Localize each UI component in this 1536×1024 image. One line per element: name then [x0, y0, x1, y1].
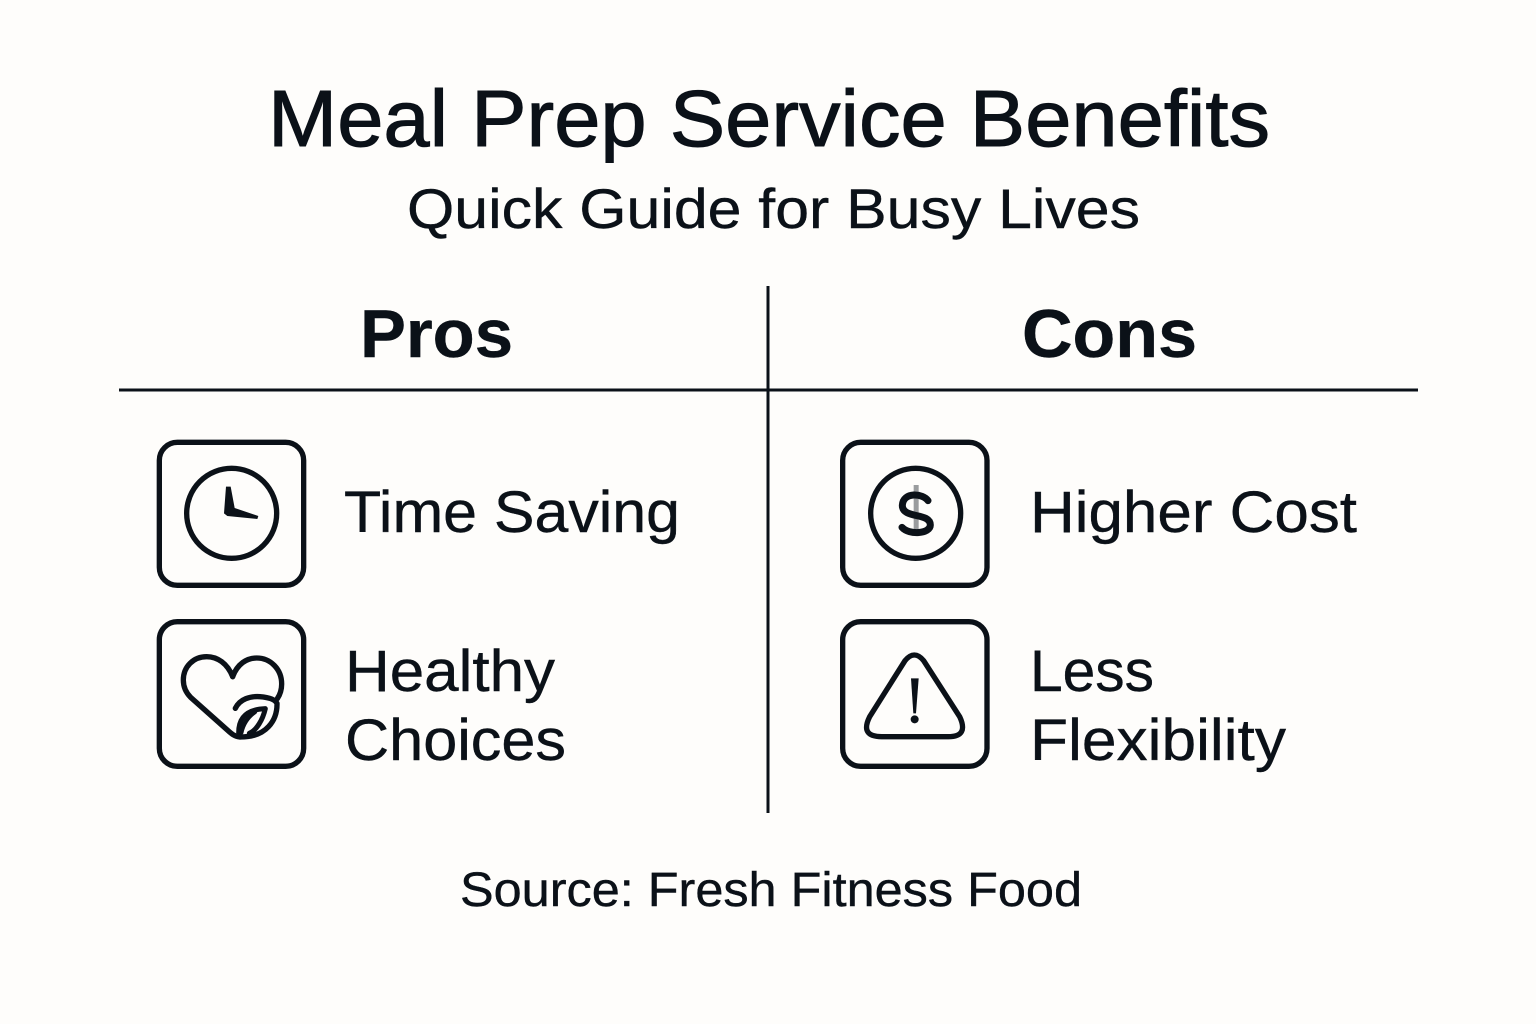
item: higher cost: [843, 442, 1357, 585]
label: healthy choices: Healthy: [345, 639, 555, 704]
subtitle: Quick Guide for Busy Lives: [407, 177, 1140, 240]
horizontal divider: [119, 388, 1418, 392]
icon: clock: [159, 442, 304, 585]
icon: heart with leaf: [159, 622, 304, 766]
item: less flexibility: [843, 622, 1286, 773]
panel: pros: [159, 296, 680, 773]
title: Meal Prep Service Benefits: [268, 74, 1270, 163]
label: less flexibility: [1030, 639, 1286, 773]
source note: Source: Fresh Fitness Food: [460, 864, 1082, 917]
label: less flexibility: Flexibility: [1030, 708, 1286, 773]
item: healthy choices: [159, 622, 566, 773]
label: healthy choices: [345, 639, 566, 773]
vertical divider: [766, 286, 770, 813]
label: higher cost: Higher Cost: [1030, 480, 1357, 545]
heading: cons: Cons: [1022, 296, 1197, 372]
panel: cons: [843, 296, 1357, 773]
item: time saving: [159, 442, 680, 585]
icon: dollar coin: [843, 442, 987, 585]
icon: warning triangle: [843, 622, 987, 766]
label: healthy choices: Choices: [345, 708, 566, 773]
label: time saving: Time Saving: [344, 480, 680, 545]
heading: pros: Pros: [360, 296, 513, 372]
label: less flexibility: Less: [1030, 639, 1154, 704]
